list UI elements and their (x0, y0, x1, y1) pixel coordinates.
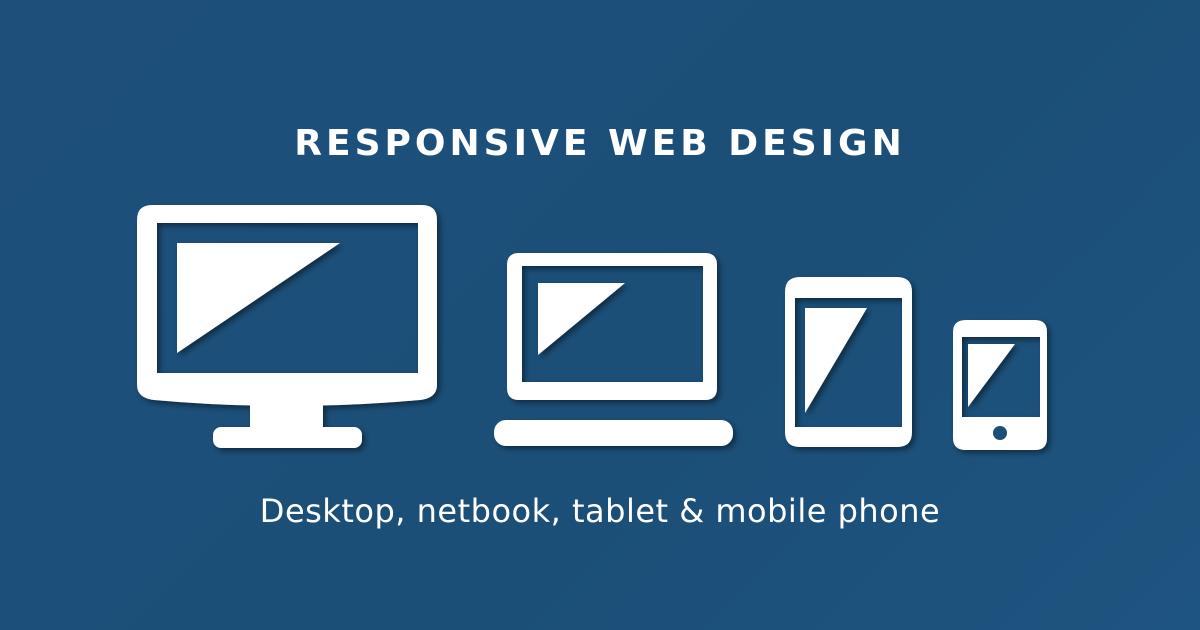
title: RESPONSIVE WEB DESIGN (294, 123, 906, 164)
icon: mobile phone (953, 320, 1047, 450)
icon: tablet (785, 277, 912, 447)
icon: netbook (494, 253, 733, 446)
subtitle: Desktop, netbook, tablet & mobile phone (260, 492, 940, 530)
icon: desktop monitor (137, 205, 437, 448)
